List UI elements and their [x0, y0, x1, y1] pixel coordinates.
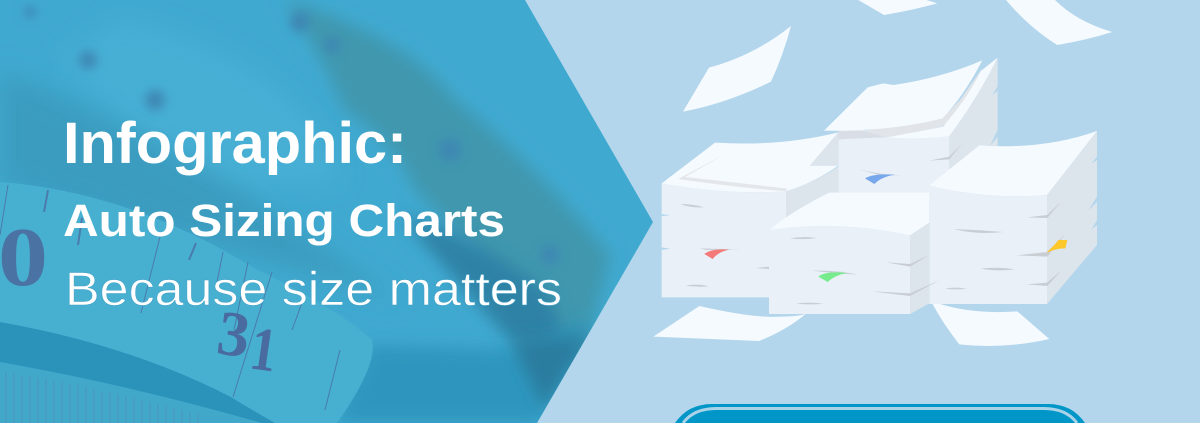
right paper stack with yellow tab	[929, 131, 1097, 304]
tape number 3: 3	[213, 297, 255, 371]
back paper stack with blue tab	[824, 58, 998, 200]
heading: Auto Sizing Charts: Auto Sizing Charts	[63, 195, 505, 246]
illustration: paper stacks	[653, 0, 1112, 346]
button	[675, 404, 1085, 423]
middle paper stack with green tab	[769, 193, 940, 314]
heading: Infographic: Infographic:	[63, 111, 407, 176]
floating paper sheets	[653, 0, 1112, 346]
subheading: Because size matters: Because size matters	[65, 262, 562, 315]
tape number 1: 1	[246, 315, 281, 385]
left paper stack with red tab	[662, 132, 838, 297]
panel: measuring tape photo	[0, 0, 660, 423]
